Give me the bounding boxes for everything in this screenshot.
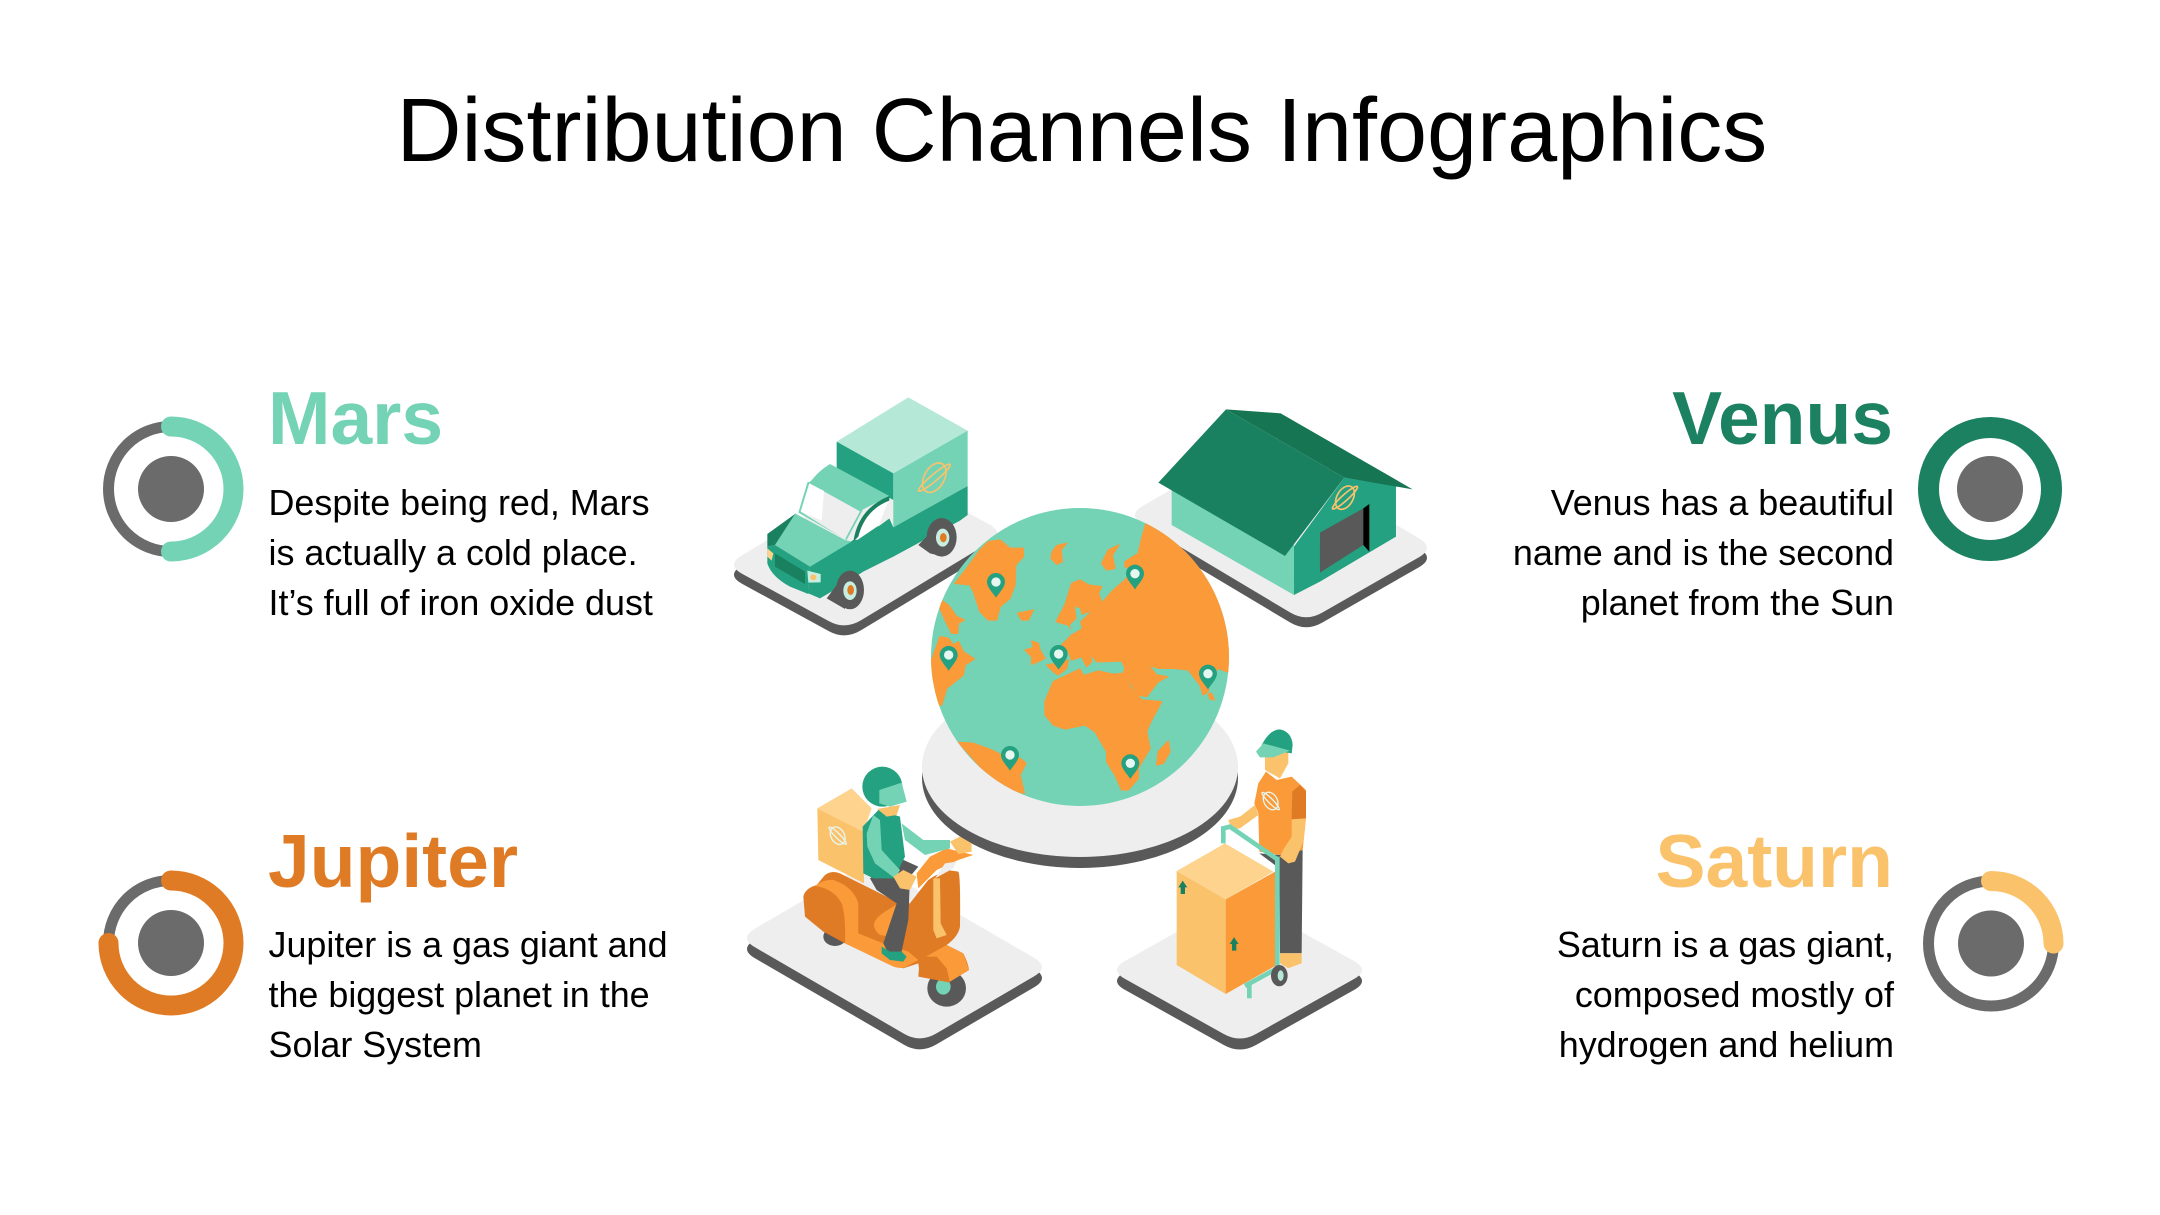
heading: Mars: Mars bbox=[268, 376, 443, 460]
text: Venus description: planet from the Sun bbox=[1581, 583, 1894, 623]
panel: Venus bbox=[1513, 376, 2052, 623]
illustration: warehouse bbox=[1158, 409, 1413, 595]
illustration: globe bbox=[931, 508, 1229, 806]
icon: Saturn ring gauge bbox=[1928, 881, 2054, 1006]
heading: Saturn: Saturn bbox=[1655, 819, 1893, 903]
text: Mars description: is actually a cold place. bbox=[268, 533, 638, 573]
text: Jupiter description: Jupiter is a gas giant and bbox=[268, 925, 668, 965]
map pins bbox=[940, 565, 1217, 779]
text: Venus description: name and is the second bbox=[1513, 533, 1894, 573]
heading: Venus: Venus bbox=[1672, 376, 1893, 460]
panel: Mars bbox=[108, 376, 653, 623]
text: Saturn description: hydrogen and helium bbox=[1559, 1025, 1894, 1065]
illustration: scooter rider bbox=[803, 767, 973, 1007]
sea: Baltic bbox=[1070, 607, 1091, 634]
text: Mars description: It’s full of iron oxide dust bbox=[268, 583, 653, 623]
heading: Jupiter: Jupiter bbox=[268, 819, 518, 903]
panel: Saturn bbox=[1557, 819, 2054, 1065]
platform: scooter bbox=[747, 867, 1042, 1049]
text: Jupiter description: the biggest planet in the bbox=[268, 975, 650, 1015]
text: Jupiter description: Solar System bbox=[268, 1025, 482, 1065]
text: Saturn description: composed mostly of bbox=[1575, 975, 1895, 1015]
illustration: delivery truck bbox=[767, 397, 968, 609]
continents bbox=[931, 523, 1229, 794]
platform: courier bbox=[1117, 902, 1362, 1050]
title: Distribution Channels Infographics bbox=[396, 81, 1767, 181]
platform: truck bbox=[734, 473, 997, 635]
platform: warehouse bbox=[1135, 446, 1427, 627]
icon: Mars ring gauge bbox=[108, 426, 234, 552]
globe base bbox=[922, 677, 1238, 868]
panel: Jupiter bbox=[108, 819, 668, 1065]
illustration: courier with trolley bbox=[1177, 729, 1306, 998]
icon: Venus ring gauge bbox=[1928, 428, 2052, 550]
text: Saturn description: Saturn is a gas giant, bbox=[1557, 925, 1894, 965]
text: Mars description: Despite being red, Mars bbox=[268, 483, 650, 523]
text: Venus description: Venus has a beautiful bbox=[1551, 483, 1894, 523]
icon: Jupiter ring gauge bbox=[108, 880, 234, 1006]
